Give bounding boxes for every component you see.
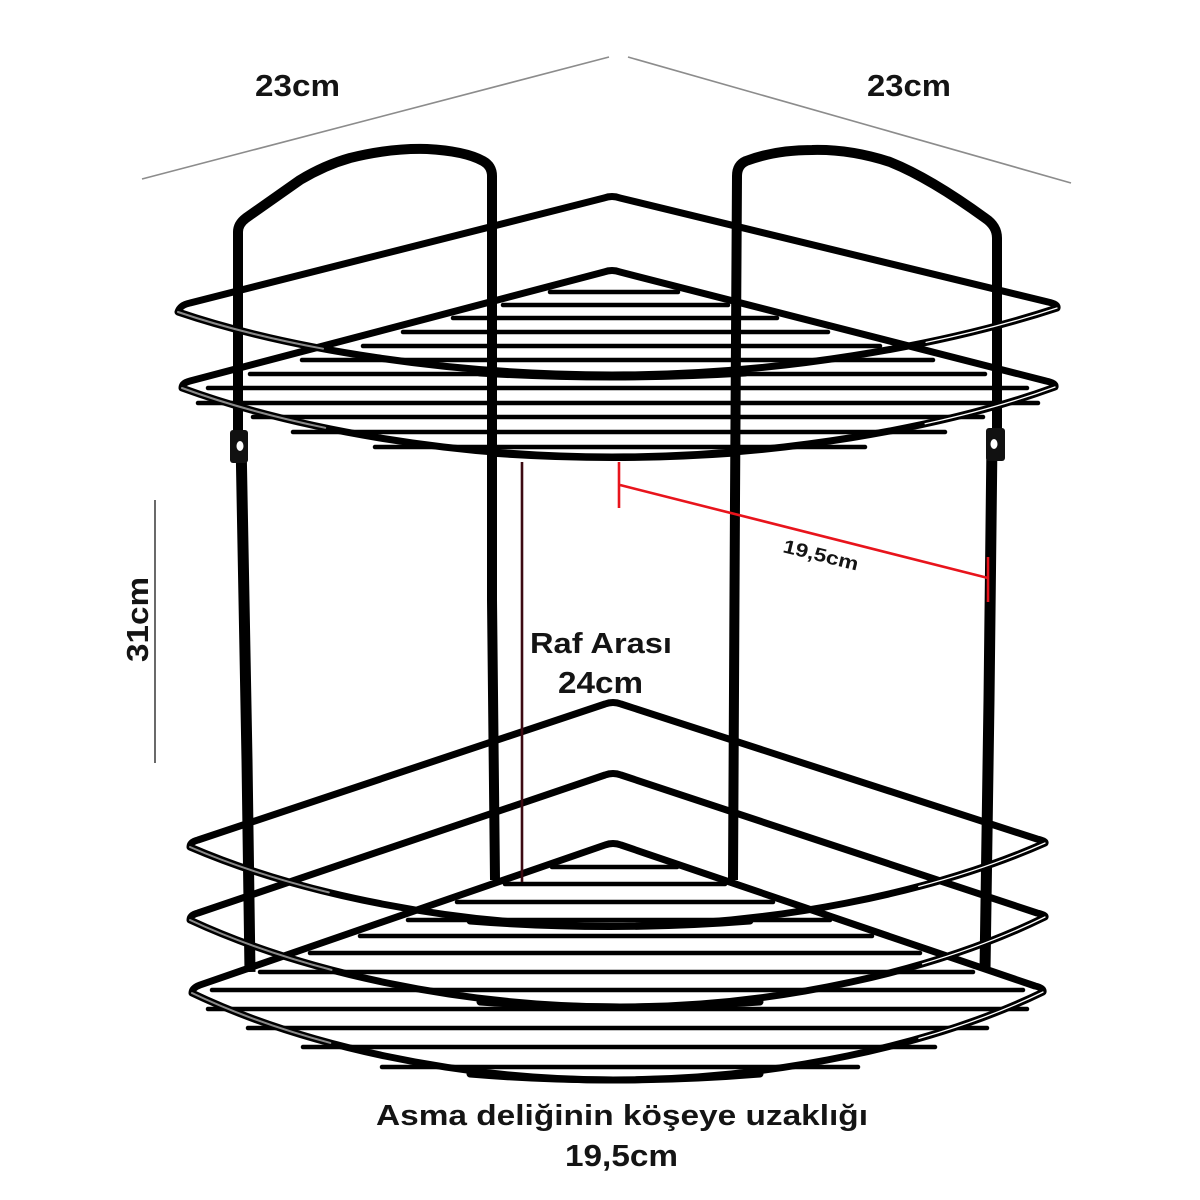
upper shelf bbox=[178, 196, 1057, 458]
label: red dimension 19,5cm: 19,5cm bbox=[781, 536, 861, 575]
label: shelf gap: 24cm bbox=[558, 665, 643, 700]
dimension line: shelf gap bbox=[521, 462, 523, 882]
left rear upright bbox=[238, 149, 495, 972]
dimension line: left width bbox=[142, 57, 609, 179]
upper shelf floor wires bbox=[198, 292, 1038, 447]
caption: 19,5cm bbox=[565, 1138, 678, 1173]
lower shelf rim highlights bbox=[190, 843, 1045, 1080]
label: left width 23cm: 23cm bbox=[255, 68, 340, 103]
lower shelf middle rim bbox=[190, 774, 1045, 1007]
lower shelf bottom rim bbox=[192, 844, 1043, 1080]
lower shelf bbox=[190, 702, 1045, 1080]
lower shelf rim thickening bbox=[470, 921, 760, 1080]
upper shelf lower rim bbox=[182, 270, 1055, 457]
right hanging bracket bbox=[986, 428, 1005, 461]
label: right width 23cm: 23cm bbox=[867, 68, 951, 103]
right rear upright bbox=[733, 150, 997, 970]
label: shelf gap: Raf Arası bbox=[530, 628, 672, 660]
label: height 31cm: 31cm bbox=[120, 577, 155, 662]
lower shelf top rim bbox=[190, 702, 1045, 926]
caption bbox=[376, 1100, 868, 1173]
dimension line: right width bbox=[628, 57, 1071, 183]
dimension line: height bbox=[154, 500, 156, 763]
lower shelf floor wires bbox=[208, 867, 1027, 1067]
wire corner shelf unit bbox=[178, 149, 1057, 1080]
left hanging bracket bbox=[230, 430, 248, 463]
upper shelf rim thickening bbox=[480, 373, 745, 458]
caption: Asma deliğinin köşeye uzaklığı bbox=[376, 1100, 868, 1132]
upper shelf top rim bbox=[178, 196, 1057, 375]
red dimension: hole to corner bbox=[619, 462, 988, 602]
label: shelf gap bbox=[530, 628, 672, 700]
upper shelf rim highlights bbox=[178, 308, 1057, 457]
